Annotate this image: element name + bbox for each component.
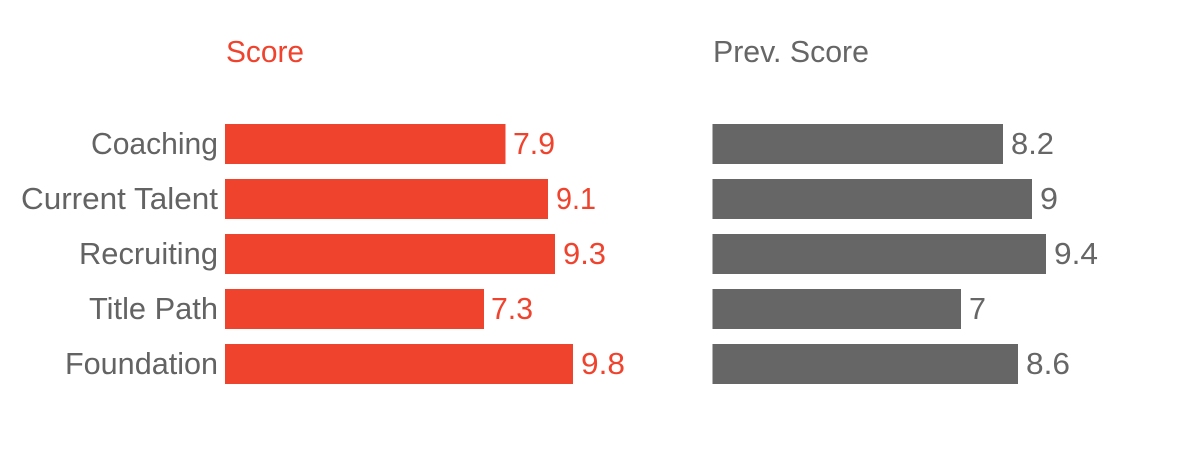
category labels [21,126,218,381]
bar: Foundation previous score [712,344,1070,384]
bar: Current Talent score: 9.1 [556,181,596,216]
heading: Score: Score [226,34,304,69]
bar: Foundation score: 9.8 [581,346,625,381]
panel: Score [225,34,625,384]
bar: Title Path previous score [712,289,986,329]
bar: Recruiting score: 9.3 [563,236,606,271]
bar: Foundation previous score: 8.6 [1026,346,1070,381]
category labels: Recruiting [79,236,218,271]
bar: Recruiting score [225,234,606,274]
category labels: Current Talent [21,181,218,216]
bar: Recruiting previous score [712,234,1098,274]
bar: Title Path score [225,289,533,329]
panel: Prev. Score [712,34,1098,384]
bar: Recruiting previous score: 9.4 [1054,236,1098,271]
bar: Coaching score [225,124,555,164]
bar: Current Talent previous score [712,179,1058,219]
bar: Title Path previous score: 7 [969,291,986,326]
category labels: Foundation [65,346,218,381]
category labels: Title Path [89,291,218,326]
heading: Prev. Score: Prev. Score [713,34,869,69]
bar: Title Path score: 7.3 [491,291,533,326]
bar: Coaching previous score [712,124,1054,164]
bar: Current Talent previous score: 9 [1040,181,1058,216]
category labels: Coaching [91,126,218,161]
bar: Coaching previous score: 8.2 [1011,126,1054,161]
bar: Current Talent score [225,179,596,219]
bar: Coaching score: 7.9 [513,126,555,161]
bar: Foundation score [225,344,625,384]
